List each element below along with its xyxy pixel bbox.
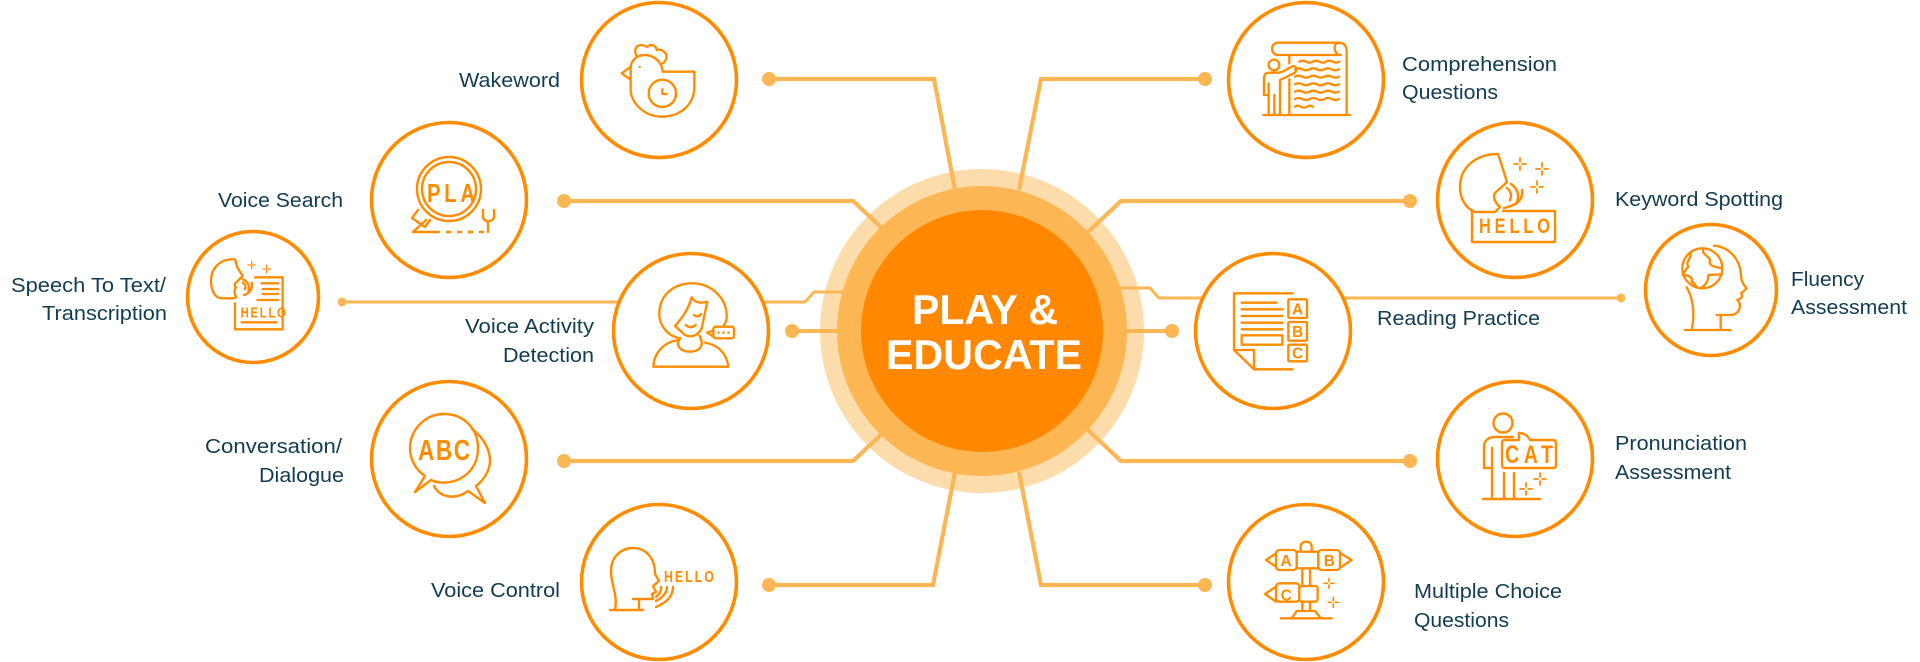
node: wakeword bbox=[459, 2, 736, 158]
icon: speaking head and document bbox=[211, 259, 286, 329]
connector: reading practice bbox=[1124, 324, 1179, 338]
label: Dialogue bbox=[259, 464, 344, 487]
node: reading practice bbox=[1196, 254, 1540, 408]
label bbox=[205, 435, 344, 487]
connector: voice search bbox=[557, 194, 884, 230]
label bbox=[11, 274, 167, 325]
icon: teacher at scroll board bbox=[1263, 43, 1350, 115]
label: Wakeword bbox=[459, 69, 560, 92]
title: EDUCATE bbox=[886, 331, 1082, 378]
icon: document with abc: A bbox=[1292, 301, 1303, 318]
title: PLAY & bbox=[912, 286, 1058, 333]
icon: abc signpost: A bbox=[1280, 553, 1292, 570]
node: multiple choice questions bbox=[1228, 504, 1562, 660]
label bbox=[465, 315, 595, 367]
icon: woman with speech bubble bbox=[653, 283, 734, 367]
icon: magnifier with play bbox=[412, 157, 494, 232]
label: Speech To Text/ bbox=[11, 274, 166, 297]
label: Reading Practice bbox=[1377, 307, 1540, 330]
label: Detection bbox=[503, 344, 594, 367]
title bbox=[886, 286, 1082, 378]
label bbox=[1414, 580, 1562, 632]
node: voice activity detection bbox=[465, 254, 768, 408]
connector: pronunciation bbox=[1088, 430, 1417, 468]
connector: conversation bbox=[557, 432, 884, 468]
node: pronunciation assessment bbox=[1438, 382, 1747, 536]
label bbox=[1791, 268, 1907, 319]
node: voice control bbox=[431, 504, 736, 660]
icon: magnifier with play: PLA bbox=[427, 179, 475, 208]
icon: speaking head with hello sign: HELLO bbox=[1479, 214, 1550, 237]
connector: fluency bbox=[1120, 288, 1626, 302]
connector: voice control bbox=[762, 472, 955, 592]
connector: comprehension bbox=[1019, 72, 1212, 190]
icon: document with abc: C bbox=[1292, 346, 1303, 363]
icon: abc signpost bbox=[1265, 542, 1352, 618]
label: Comprehension bbox=[1402, 53, 1557, 76]
node: speech to text bbox=[11, 232, 318, 362]
connector: multiple choice bbox=[1019, 472, 1212, 592]
hub outer ring bbox=[820, 169, 1144, 493]
label: Questions bbox=[1414, 609, 1509, 632]
label: Voice Activity bbox=[465, 315, 595, 338]
connector: voice activity detection bbox=[785, 324, 840, 338]
connector: speech to text bbox=[338, 292, 845, 306]
icon: abc speech bubbles: ABC bbox=[418, 433, 470, 467]
icon: document with abc bbox=[1234, 293, 1307, 369]
label bbox=[1615, 432, 1747, 484]
label: Questions bbox=[1402, 81, 1498, 104]
icon: speaking head with hello sign bbox=[1460, 154, 1555, 242]
label: Multiple Choice bbox=[1414, 580, 1562, 603]
label: Assessment bbox=[1791, 296, 1907, 319]
icon: head saying hello: HELLO bbox=[664, 569, 714, 586]
icon: abc speech bubbles bbox=[410, 414, 490, 503]
icon: person with cat speech bubble: CAT bbox=[1505, 441, 1553, 469]
label: Voice Control bbox=[431, 579, 560, 602]
node: voice search bbox=[218, 122, 526, 278]
label: Assessment bbox=[1615, 461, 1731, 484]
node: comprehension questions bbox=[1228, 2, 1557, 158]
label: Keyword Spotting bbox=[1615, 188, 1783, 211]
label: Voice Search bbox=[218, 189, 343, 212]
hub inner circle bbox=[861, 210, 1103, 452]
icon: head with globe bbox=[1682, 246, 1747, 330]
connector: keyword spotting bbox=[1088, 194, 1417, 232]
icon: chicken with clock bbox=[622, 45, 694, 117]
connector: wakeword bbox=[762, 72, 955, 190]
icon: abc signpost: B bbox=[1324, 553, 1335, 570]
icon: person with cat speech bubble bbox=[1483, 414, 1556, 499]
icon: head saying hello bbox=[610, 548, 714, 610]
icon: abc signpost: C bbox=[1281, 588, 1292, 605]
node: conversation bbox=[205, 382, 526, 536]
label: Fluency bbox=[1791, 268, 1865, 291]
node: keyword spotting bbox=[1438, 122, 1783, 278]
label: Transcription bbox=[42, 302, 167, 325]
hub middle ring bbox=[837, 186, 1127, 476]
label: Pronunciation bbox=[1615, 432, 1747, 455]
icon: document with abc: B bbox=[1292, 324, 1303, 341]
icon: speaking head and document: HELLO bbox=[241, 304, 286, 321]
label: Conversation/ bbox=[205, 435, 342, 458]
node: fluency assessment bbox=[1646, 224, 1907, 356]
label bbox=[1402, 53, 1557, 104]
